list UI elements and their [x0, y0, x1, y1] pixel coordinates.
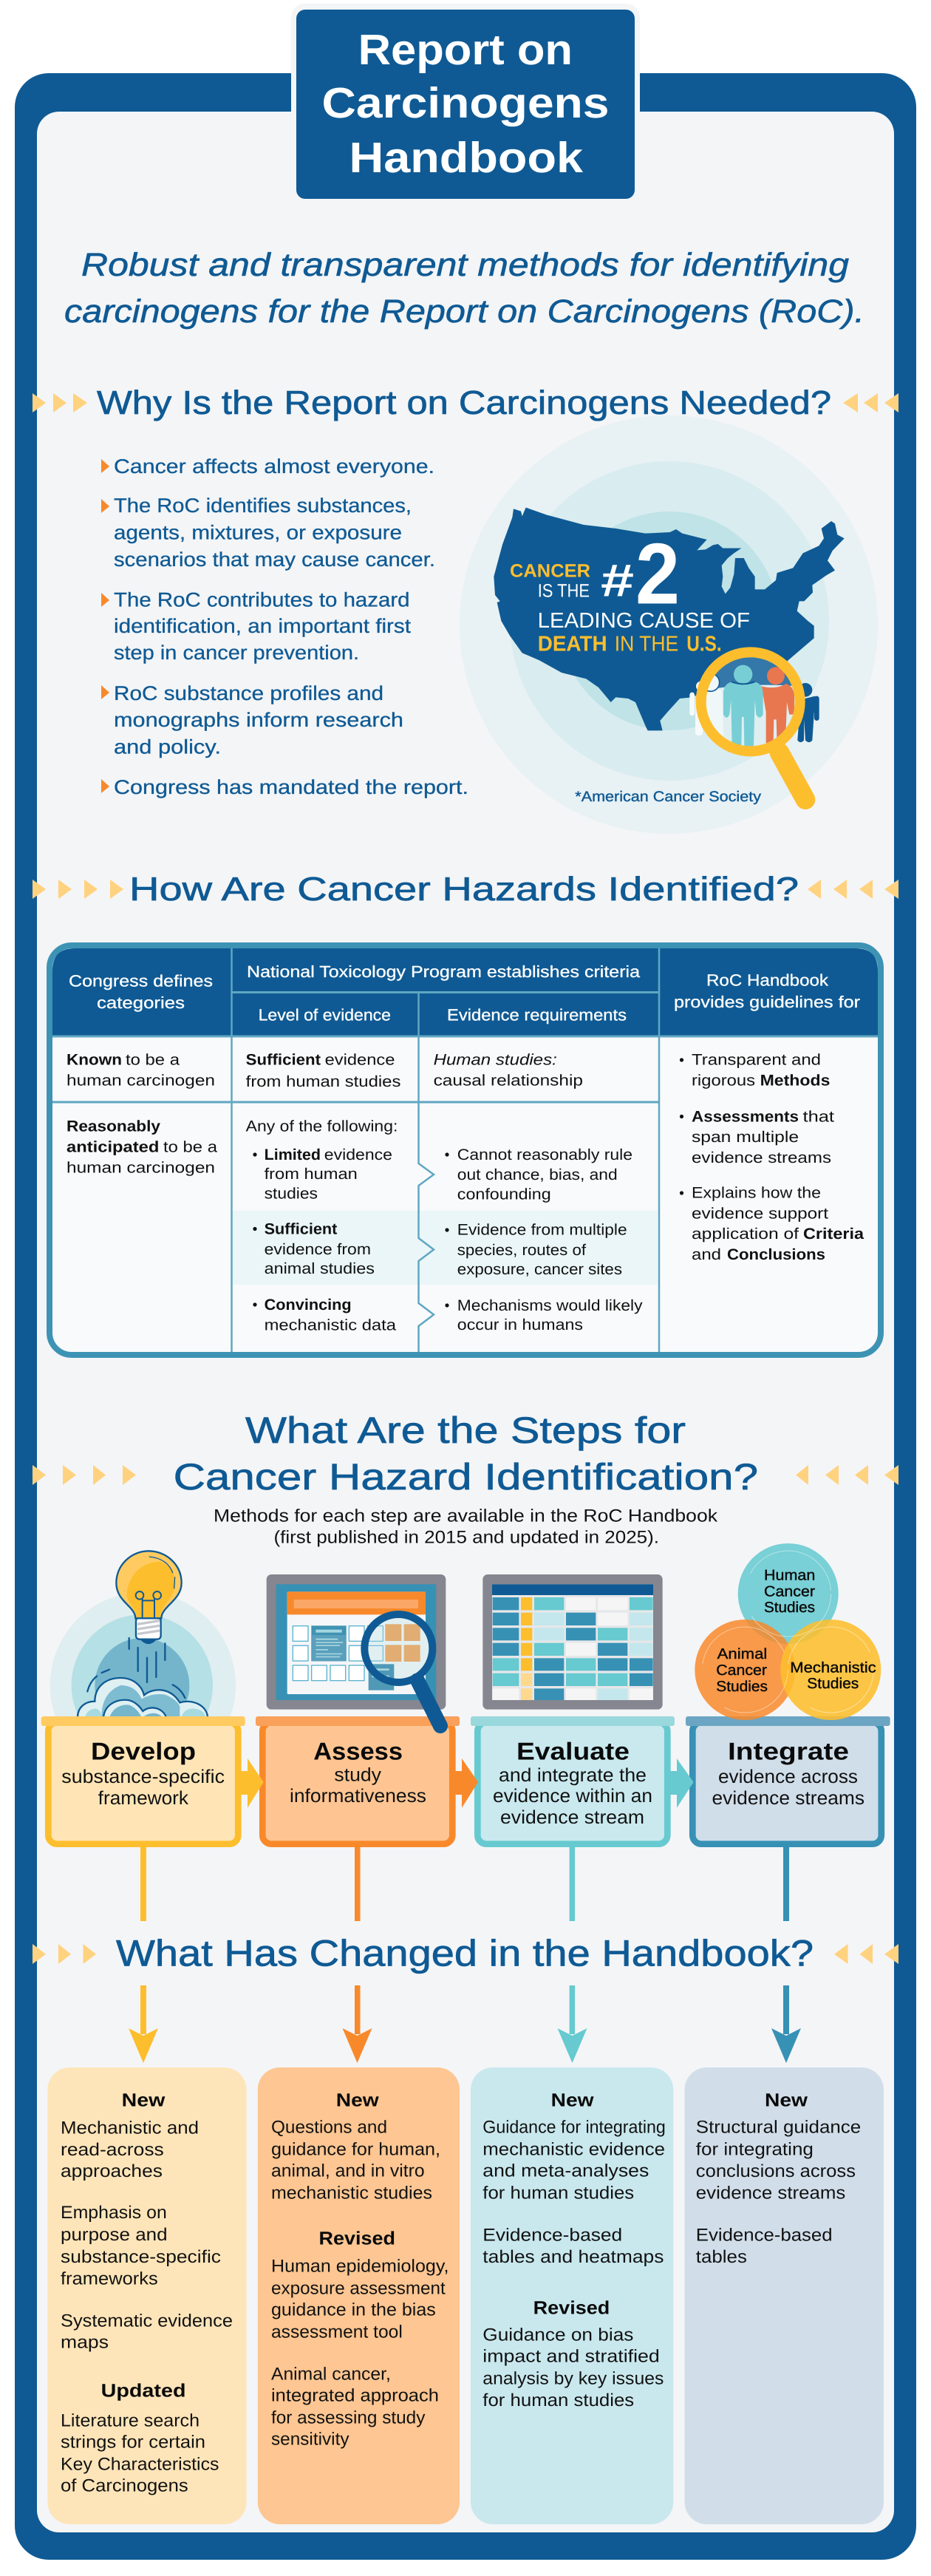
subtitle	[64, 247, 864, 330]
table header	[69, 962, 860, 1024]
circle label: human cancer studies: Cancer	[764, 1583, 815, 1600]
circle label: human cancer studies	[764, 1567, 815, 1616]
table row: reasonably anticipated: out chance, bias, and	[457, 1166, 618, 1183]
card: develop changes: Key Characteristics	[61, 2455, 219, 2475]
reasons bullet list	[101, 455, 468, 798]
step box: develop: substance-specific	[61, 1767, 225, 1787]
reasons bullet list: The RoC contributes to hazard	[114, 588, 409, 611]
reasons bullet list: RoC substance profiles and	[114, 682, 383, 704]
card: assess changes: for assessing study	[271, 2407, 425, 2427]
card: evaluate changes: for human studies	[482, 2183, 634, 2203]
table column: handbook guidelines: Assessments	[692, 1109, 799, 1125]
circle label: mechanistic studies	[790, 1659, 876, 1692]
circle label: animal cancer studies: Animal	[717, 1646, 767, 1662]
arrow: develop to assess	[241, 1758, 264, 1808]
card: develop changes: Updated	[101, 2381, 186, 2402]
card: integrate changes: tables	[696, 2247, 747, 2267]
step box: develop: Develop	[91, 1738, 196, 1765]
card: assess changes: animal, and in vitro	[271, 2161, 425, 2181]
map callout text: U.S.	[686, 633, 722, 656]
circle label: human cancer studies: Human	[764, 1567, 815, 1583]
steps intro text: Methods for each step are available in the RoC Handbook	[214, 1506, 718, 1526]
hazard criteria table	[50, 945, 881, 1355]
concentric circles behind map	[460, 415, 878, 834]
table column: handbook guidelines: Conclusions	[727, 1246, 825, 1263]
section heading: steps: What Are the Steps for	[245, 1410, 686, 1451]
card: assess changes: guidance in the bias	[271, 2300, 436, 2320]
table column: handbook guidelines: rigorous	[692, 1072, 755, 1090]
step box: assess: study	[334, 1765, 381, 1786]
icon: three overlapping evidence circles	[695, 1543, 881, 1720]
table column: handbook guidelines: Transparent and	[692, 1051, 821, 1069]
card: integrate changes: New	[765, 2090, 808, 2110]
card: assess changes: guidance for human,	[271, 2140, 440, 2160]
table header: Level of evidence	[259, 1005, 391, 1024]
card: evaluate changes: analysis by key issues	[482, 2369, 664, 2389]
section heading: steps	[33, 1410, 898, 1498]
step box: integrate	[686, 1716, 890, 1844]
step box: integrate: Integrate	[728, 1738, 849, 1765]
table row: reasonably anticipated: Cannot reasonably rule	[457, 1146, 632, 1163]
title: Carcinogens	[322, 79, 609, 127]
subtitle: Robust and transparent methods for identifying	[81, 247, 850, 283]
reasons bullet list: Cancer affects almost everyone.	[114, 455, 434, 478]
table row: reasonably anticipated: from human	[265, 1166, 358, 1183]
step box: evaluate: and integrate the	[499, 1765, 647, 1786]
card: develop changes: of Carcinogens	[61, 2476, 188, 2496]
title banner	[291, 4, 640, 203]
card: assess changes: assessment tool	[271, 2322, 403, 2342]
table row: known: Sufficient	[246, 1051, 321, 1069]
table row: reasonably anticipated: Sufficient	[265, 1221, 337, 1237]
table row: known: causal relationship	[434, 1072, 583, 1090]
icon: magnifying glass over people	[689, 652, 819, 800]
table column: handbook guidelines	[680, 1051, 864, 1263]
table row: reasonably anticipated: anticipated	[66, 1138, 159, 1156]
step box: evaluate: Evaluate	[516, 1738, 630, 1765]
table row: known	[66, 1051, 583, 1090]
table row: known: from human studies	[246, 1073, 400, 1090]
table row: reasonably anticipated: studies	[265, 1186, 318, 1203]
map of the United States	[494, 508, 845, 730]
steps intro text	[214, 1506, 718, 1548]
table row: reasonably anticipated	[66, 1118, 643, 1334]
card: develop changes: approaches	[61, 2161, 163, 2181]
card: assess changes: Revised	[319, 2229, 395, 2249]
steps intro text: (first published in 2015 and updated in 2025).	[273, 1528, 659, 1548]
source note: *American Cancer Society	[575, 789, 761, 805]
card: develop changes: substance-specific	[61, 2247, 221, 2267]
card: develop changes	[47, 2067, 247, 2524]
card: develop changes: strings for certain	[61, 2433, 205, 2453]
map callout text: LEADING CAUSE OF	[538, 609, 750, 633]
arrow: assess to evaluate	[455, 1758, 478, 1808]
arrow: develop down	[129, 1985, 158, 2063]
reasons bullet list: agents, mixtures, or exposure	[114, 522, 402, 544]
reasons bullet list: identification, an important first	[114, 615, 412, 637]
table row: known: to be a	[126, 1051, 180, 1069]
circle label: animal cancer studies: Cancer	[716, 1662, 767, 1679]
step box: assess: Assess	[313, 1738, 403, 1765]
section heading: what has changed: What Has Changed in the Handbook?	[116, 1932, 814, 1974]
map callout text: DEATH	[538, 633, 607, 656]
table row: known: human carcinogen	[66, 1072, 215, 1090]
card: integrate changes: Structural guidance	[696, 2118, 861, 2138]
table header: RoC Handbook	[706, 971, 829, 989]
card: develop changes: purpose and	[61, 2225, 168, 2245]
map callout text: CANCER	[510, 561, 590, 582]
step box: assess: informativeness	[290, 1786, 426, 1807]
table row: reasonably anticipated: animal studies	[265, 1260, 375, 1277]
connector lines from boxes to heading	[140, 1847, 789, 1921]
card: assess changes: Animal cancer,	[271, 2364, 391, 2384]
card: develop changes: read-across	[61, 2140, 164, 2160]
table header: National Toxicology Program establishes criteria	[247, 962, 641, 981]
table row: reasonably anticipated: Mechanisms would likely	[457, 1297, 643, 1314]
table column: handbook guidelines: Explains how the	[692, 1184, 821, 1202]
card: integrate changes: for integrating	[696, 2140, 814, 2160]
circle label: animal cancer studies	[716, 1646, 768, 1695]
card: develop changes: Emphasis on	[61, 2203, 167, 2223]
card: evaluate changes: Guidance for integrating	[482, 2118, 666, 2138]
table column: handbook guidelines: Criteria	[803, 1226, 864, 1243]
table column: handbook guidelines: Methods	[760, 1072, 830, 1090]
table column: handbook guidelines: that	[802, 1109, 834, 1125]
card: develop changes: New	[122, 2090, 166, 2110]
map callout text	[510, 526, 750, 656]
table row: reasonably anticipated: to be a	[163, 1138, 217, 1156]
table header: categories	[97, 993, 185, 1012]
reasons bullet list: monographs inform research	[114, 709, 403, 731]
title: Handbook	[349, 134, 584, 182]
reasons bullet list: The RoC identifies substances,	[114, 495, 412, 517]
reasons bullet list: scenarios that may cause cancer.	[114, 548, 435, 571]
map callout text: 2	[635, 526, 680, 622]
arrow: evaluate to integrate	[670, 1758, 694, 1808]
card: evaluate changes: Evidence-based	[482, 2226, 622, 2246]
table column: handbook guidelines: span multiple	[692, 1129, 799, 1146]
card: evaluate changes: mechanistic evidence	[482, 2140, 665, 2160]
icon: tablet with study grid and magnifier	[267, 1574, 446, 1726]
table row: reasonably anticipated: human carcinogen	[66, 1159, 215, 1177]
table row: reasonably anticipated: Reasonably	[66, 1118, 160, 1135]
card: integrate changes: Evidence-based	[696, 2226, 833, 2246]
card: evaluate changes: for human studies	[482, 2390, 634, 2410]
step box: evaluate	[471, 1716, 675, 1844]
card: develop changes: Systematic evidence	[61, 2311, 233, 2331]
section heading: steps: Cancer Hazard Identification?	[174, 1456, 758, 1498]
circle label: mechanistic studies: Mechanistic	[790, 1659, 876, 1676]
table row: known: evidence	[325, 1051, 395, 1069]
reasons bullet list: step in cancer prevention.	[114, 642, 359, 664]
section heading: why needed: Why Is the Report on Carcinogens Needed?	[97, 384, 831, 421]
section heading: how identified	[33, 870, 898, 908]
card: evaluate changes: impact and stratified	[482, 2347, 660, 2367]
card: develop changes: maps	[61, 2333, 109, 2353]
step box: develop: framework	[98, 1788, 188, 1809]
arrow: integrate down	[771, 1985, 801, 2063]
map callout text: IN THE	[615, 633, 678, 656]
step box: assess	[256, 1716, 460, 1844]
table header: provides guidelines for	[674, 993, 860, 1011]
table row: reasonably anticipated: Evidence from multiple	[457, 1222, 627, 1239]
card: evaluate changes: Revised	[533, 2298, 610, 2319]
card: assess changes: New	[336, 2090, 379, 2110]
table row: reasonably anticipated: evidence	[324, 1146, 392, 1163]
table header: Evidence requirements	[447, 1005, 627, 1024]
table row: reasonably anticipated: mechanistic data	[265, 1317, 396, 1334]
reasons bullet list: Congress has mandated the report.	[114, 776, 468, 798]
table row: reasonably anticipated: Limited	[265, 1146, 321, 1163]
table row: reasonably anticipated: species, routes of	[457, 1242, 586, 1259]
circle label: mechanistic studies: Studies	[807, 1676, 859, 1692]
table column: handbook guidelines: and	[692, 1246, 721, 1263]
table row: known: Known	[66, 1051, 122, 1069]
table header: Congress defines	[69, 971, 213, 990]
subtitle: carcinogens for the Report on Carcinogens (RoC).	[64, 293, 864, 330]
step box: evaluate: evidence within an	[493, 1786, 652, 1807]
table row: reasonably anticipated: occur in humans	[457, 1316, 583, 1333]
card: evaluate changes	[471, 2067, 673, 2524]
table row: reasonably anticipated: confounding	[457, 1186, 551, 1203]
table row: reasonably anticipated: evidence from	[265, 1241, 371, 1258]
section heading: how identified: How Are Cancer Hazards Identified?	[129, 870, 799, 908]
card: develop changes: Literature search	[61, 2411, 200, 2431]
icon: person outside lens left	[689, 682, 706, 735]
icon: person outside lens right	[797, 683, 819, 742]
card: evaluate changes: tables and heatmaps	[482, 2247, 664, 2267]
table row: reasonably anticipated: Any of the following:	[246, 1118, 398, 1135]
step box: integrate: evidence across	[718, 1767, 858, 1787]
card: integrate changes	[684, 2067, 884, 2524]
lens contents	[706, 657, 794, 747]
card: assess changes: integrated approach	[271, 2386, 439, 2406]
card: assess changes: mechanistic studies	[271, 2183, 432, 2203]
circle label: animal cancer studies: Studies	[716, 1679, 768, 1695]
card: assess changes: exposure assessment	[271, 2278, 446, 2298]
card: assess changes	[258, 2067, 460, 2524]
card: integrate changes: evidence streams	[696, 2183, 845, 2203]
table column: handbook guidelines: application of	[692, 1226, 799, 1243]
circle label: human cancer studies: Studies	[764, 1600, 815, 1616]
card: integrate changes: conclusions across	[696, 2161, 856, 2181]
card: assess changes: sensitivity	[271, 2430, 349, 2450]
arrow: evaluate down	[557, 1985, 587, 2063]
icon: tablet with evidence heatmap	[482, 1574, 663, 1710]
card: develop changes: Mechanistic and	[61, 2118, 199, 2138]
title	[322, 26, 609, 182]
table column: handbook guidelines: evidence support	[692, 1205, 828, 1223]
table row: known: Human studies:	[434, 1051, 557, 1069]
step box: evaluate: evidence stream	[500, 1807, 644, 1828]
arrow: assess down	[343, 1985, 372, 2063]
card: develop changes: frameworks	[61, 2269, 158, 2289]
card: assess changes: Questions and	[271, 2118, 387, 2138]
icon: light bulb rising from cloud	[50, 1550, 236, 1716]
map callout text: #	[601, 556, 634, 607]
card: evaluate changes: Guidance on bias	[482, 2325, 633, 2345]
reasons bullet list: and policy.	[114, 736, 221, 758]
table row: reasonably anticipated: Convincing	[265, 1297, 352, 1314]
card: evaluate changes: New	[551, 2090, 594, 2110]
map callout text: IS THE	[538, 581, 590, 602]
table column: handbook guidelines: evidence streams	[692, 1149, 831, 1166]
card: evaluate changes: and meta-analyses	[482, 2161, 649, 2181]
step box: develop	[41, 1716, 245, 1844]
table row: reasonably anticipated: exposure, cancer sites	[457, 1261, 622, 1278]
card: assess changes: Human epidemiology,	[271, 2256, 449, 2276]
title: Report on	[358, 26, 573, 74]
step box: integrate: evidence streams	[712, 1788, 864, 1809]
